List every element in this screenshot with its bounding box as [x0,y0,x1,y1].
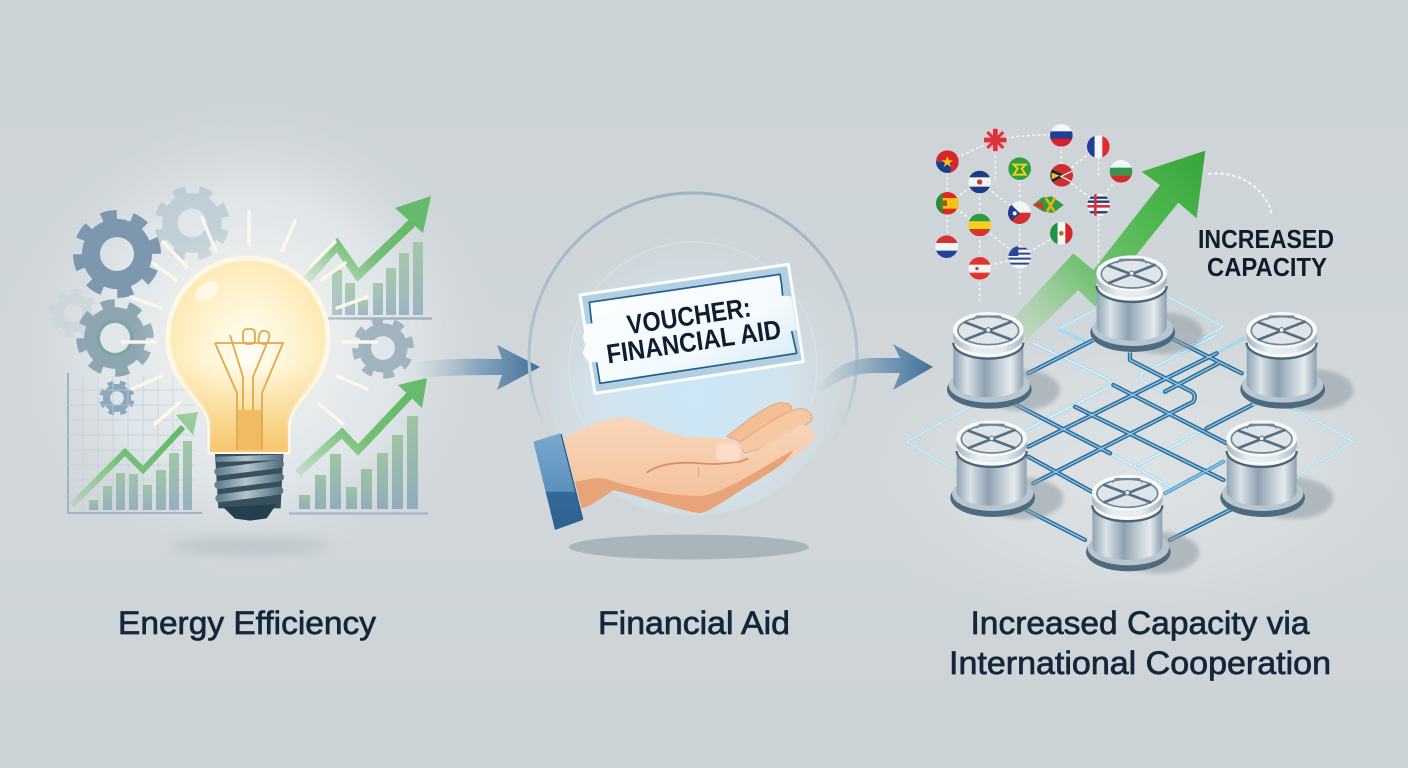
flag: spain [936,192,959,215]
panel: increased capacity illustration [907,124,1353,573]
flag: navy white navy [968,171,991,193]
bubble circle [529,193,857,521]
dotted connectors [947,135,1121,300]
voucher text [601,289,783,369]
tank: bottom center [1086,475,1199,573]
caption: increased capacity via international cooperation [949,605,1331,681]
caption: financial aid: Financial Aid [598,605,790,641]
flag: green white red [1050,222,1073,245]
flag: red white cross [984,129,1007,151]
flag: blue triangle white red [1008,201,1031,224]
flag: red white red [968,257,991,280]
flag: white green red [1110,160,1132,183]
flag: union style [1087,194,1110,216]
dotted arc to label [1209,173,1272,216]
flag: leaf shaped [1033,196,1064,213]
tank: upper left [947,312,1060,411]
label: increased capacity: CAPACITY [1207,252,1327,282]
flag: red white blue [935,235,959,258]
flag: green yellow [1008,157,1031,180]
label: increased capacity [1198,224,1334,282]
voucher text: FINANCIAL AID [604,314,783,369]
voucher ticket [580,264,803,393]
icon: light rays [122,212,377,424]
caption: increased capacity via international cooperation: International Cooperation [949,645,1331,681]
shadow under hand [569,534,809,560]
tank: top center [1090,255,1203,354]
panel: energy efficiency illustration [52,184,432,554]
flags network [935,124,1132,300]
flag: red blue star [936,150,959,173]
tank: lower left [950,420,1063,519]
shadow under bulb [172,538,328,554]
icon: open hand [533,403,815,530]
flag: france [1087,135,1110,158]
glow behind bulb [132,217,368,453]
label: increased capacity: INCREASED [1198,224,1334,254]
chart: bottom right bars and arrow [289,378,428,514]
caption: energy efficiency: Energy Efficiency [118,605,376,641]
tank: upper right [1240,312,1353,411]
icon: light bulb [168,258,328,521]
pipe network [907,297,1353,540]
voucher text: VOUCHER: [625,292,753,340]
arrow: aid to capacity [813,344,933,397]
flag: greece [1008,246,1031,269]
chart: top right bars and arrow [307,196,432,318]
arrow: efficiency to aid [415,345,540,390]
panel: financial aid illustration [529,193,857,560]
flag: red black diagonal [1050,164,1073,187]
caption: increased capacity via international cooperation: Increased Capacity via [970,605,1310,641]
infographic canvas [66,124,1355,681]
icon: gears [52,184,419,416]
chart: bottom left bars and arrow [68,373,202,513]
big green growth arrow [1015,151,1205,340]
flag: green yellow red [968,214,991,236]
tank: lower right [1220,420,1333,519]
storage tanks [947,255,1353,573]
flag: white blue red [1050,124,1073,147]
